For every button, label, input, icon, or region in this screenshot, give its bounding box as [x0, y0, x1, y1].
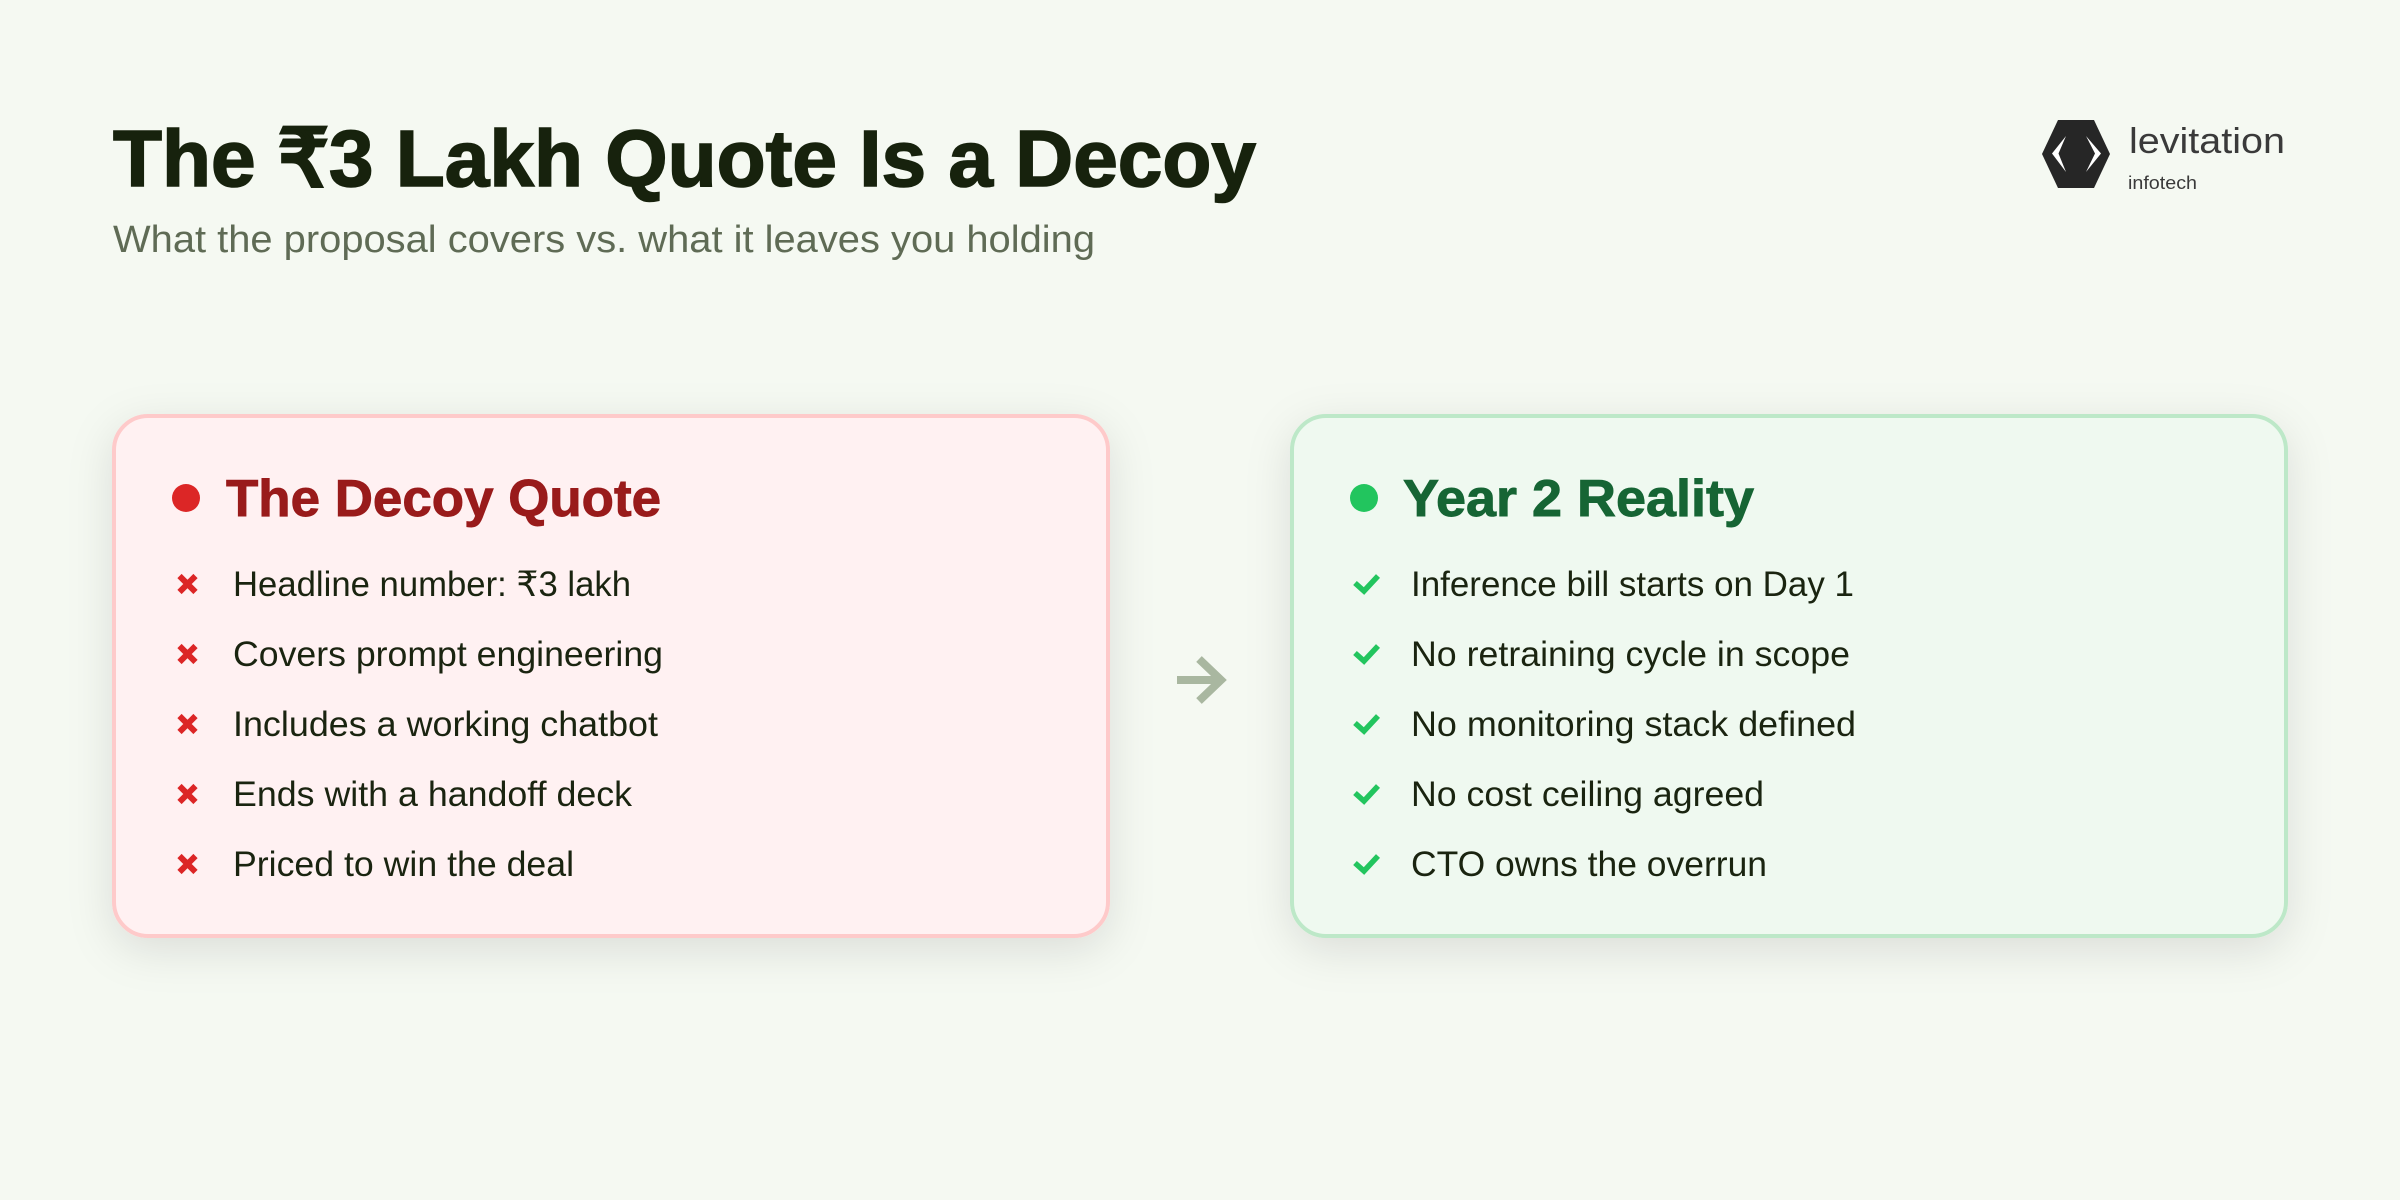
item 2: No retraining cycle in scope	[1411, 635, 1850, 674]
title: The ₹3 Lakh Quote Is a Decoy	[113, 114, 1257, 203]
item 3: Includes a working chatbot	[233, 705, 658, 744]
item 1: Inference bill starts on Day 1	[1411, 565, 1854, 604]
header	[113, 114, 1257, 261]
list: reality items	[1355, 565, 1856, 884]
icon: hexagon logo mark	[2042, 120, 2110, 188]
panel heading: Year 2 Reality	[1403, 470, 1754, 528]
item 1: Headline number: ₹3 lakh	[233, 565, 631, 604]
item 2: Covers prompt engineering	[233, 635, 663, 674]
logo: levitation infotech	[2042, 120, 2285, 193]
panel heading: The Decoy Quote	[226, 470, 661, 528]
logo wordmark: levitation	[2129, 120, 2285, 161]
list: decoy items	[180, 565, 663, 884]
logo subtext: infotech	[2128, 173, 2197, 193]
item 4: Ends with a handoff deck	[233, 775, 633, 814]
item 5: Priced to win the deal	[233, 845, 574, 884]
status dot: red	[172, 484, 200, 512]
panel: year 2 reality	[1292, 416, 2286, 936]
panel: the decoy quote	[114, 416, 1108, 936]
subtitle: What the proposal covers vs. what it leaves you holding	[113, 219, 1095, 261]
status dot: green	[1350, 484, 1378, 512]
item 5: CTO owns the overrun	[1411, 845, 1767, 884]
arrow	[1177, 659, 1221, 701]
item 4: No cost ceiling agreed	[1411, 775, 1764, 814]
item 3: No monitoring stack defined	[1411, 705, 1856, 744]
